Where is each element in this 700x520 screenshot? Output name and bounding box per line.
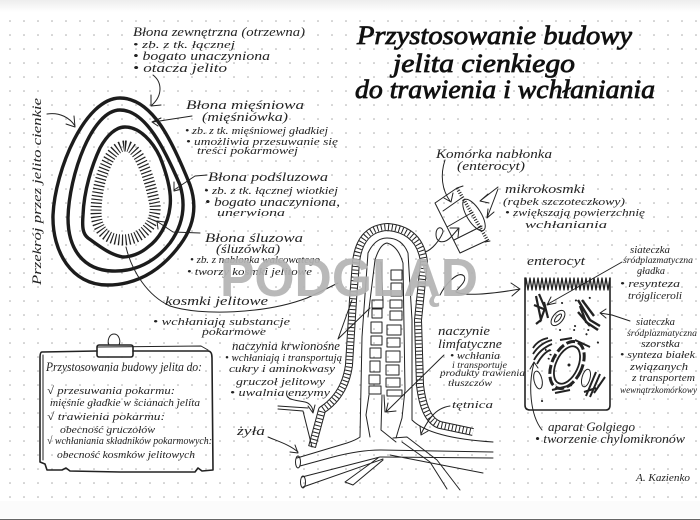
text: Golgi apparatus (535, 419, 685, 446)
arrow: outer membrane (151, 75, 161, 106)
arrow: villi leader (126, 247, 338, 312)
text: lymphatic vessels: i transportuje (452, 361, 507, 371)
arrow: vein (268, 437, 298, 453)
text: muscular layer (185, 97, 338, 157)
text: mucosa: • zb. z nabłonka walcowatego (190, 254, 320, 266)
capillary mesh (369, 270, 402, 396)
enterocyte cell (525, 278, 610, 410)
arrow: mucosa (157, 221, 200, 233)
text: rough ER: siateczka (636, 316, 675, 328)
text: muscular layer: • zb. z tk. mięśniowej gładkiej (185, 125, 328, 137)
arrow: intestinal gland (286, 391, 315, 413)
text: lymphatic vessels: produkty trawienia (439, 369, 525, 379)
text: rough ER: śródplazmatyczna (627, 329, 697, 339)
note card (40, 334, 213, 472)
text: microvilli: • zwiększają powierzchnię (505, 207, 645, 219)
title: jelita cienkiego (390, 49, 575, 78)
text: mucosa (187, 230, 320, 278)
arrow: artery (420, 406, 450, 435)
rough endoplasmic reticulum (578, 300, 600, 330)
text: submucosa: • zb. z tk. łącznej wiotkiej (204, 185, 338, 197)
epithelial fragment (435, 186, 490, 253)
arrow: cross-section label (47, 114, 75, 127)
curly arrow: villus to enterocyte (440, 275, 520, 296)
signature: A. Kazienko (635, 472, 690, 484)
title: Przystosowanie budowy (356, 21, 633, 50)
note card: √ przesuwania pokarmu: (47, 385, 175, 397)
villus diagram (278, 227, 493, 490)
capillary and lacteal walls (360, 238, 493, 442)
note card: √ wchłaniania składników pokarmowych: (47, 435, 212, 447)
arrow: rough ER (600, 309, 630, 321)
text: intestinal villi (153, 293, 290, 338)
curly arrow: villus to fragment (425, 228, 459, 252)
text: Golgi apparatus: • tworzenie chylomikronów (535, 431, 685, 446)
arrows: blood vessels (338, 300, 370, 339)
gland wall (278, 406, 312, 447)
text: blood vessels: • wchłaniają i transportują (225, 352, 342, 364)
text: rough ER: związanych (629, 361, 689, 373)
arrow: epithelial cell (442, 160, 453, 202)
enterocyte heading: enterocyt (527, 253, 585, 268)
Golgi apparatus (533, 338, 552, 364)
text: lymphatic vessels (438, 323, 525, 389)
text: mucosa: (śluzówka) (216, 241, 280, 256)
text: lymphatic vessels: tłuszczów (448, 379, 493, 389)
text: microvilli: wchłaniania (525, 219, 608, 231)
text: smooth ER (620, 244, 693, 302)
text: smooth ER: śródplazmatyczna (623, 256, 693, 266)
text: blood vessels: gruczoł jelitowy (236, 376, 325, 388)
text: rough ER: szorstka (641, 338, 681, 350)
nucleus (549, 342, 585, 388)
note card: obecność gruczołów (60, 424, 156, 436)
text: mucosa: Błona śluzowa (205, 230, 304, 245)
text: rough ER (620, 316, 698, 396)
text: lymphatic vessels: limfatyczne (438, 336, 502, 351)
note card: √ trawienia pokarmu: (47, 411, 165, 423)
text: blood vessels: • uwalnia enzymy (230, 387, 330, 399)
text: outer membrane: Błona zewnętrzna (otrzewna) (133, 24, 305, 39)
text: submucosa: • bogato unaczyniona, (205, 194, 340, 209)
text: microvilli: mikrokosmki (505, 181, 585, 196)
text: microvilli (503, 181, 645, 231)
arrow: submucosa (174, 175, 207, 191)
text: smooth ER: trójgliceroli (628, 290, 682, 302)
vertical label: cross-section: Przekrój przez jelito cienkie (29, 98, 44, 286)
text: blood vessels (225, 338, 342, 399)
text: epithelial cell: (enterocyt) (457, 158, 525, 173)
tubes at the base (297, 437, 493, 487)
text: submucosa (204, 169, 340, 219)
text: blood vessels: naczynia krwionośne (232, 338, 340, 353)
text: intestinal villi: kosmki jelitowe (165, 293, 268, 308)
text: outer membrane: • bogato unaczyniona (133, 48, 271, 63)
note card: mięśnie gładkie w ścianach jelita (50, 397, 201, 409)
arrow: lymphatic vessel (386, 355, 444, 412)
text: epithelial cell: Komórka nabłonka (435, 146, 553, 161)
text: lymphatic vessels: • wchłania (450, 350, 501, 362)
cross-section of the small intestine (53, 98, 194, 285)
text: mucosa: • tworzy kosmki jelitowe (187, 266, 312, 278)
text: smooth ER: • resynteza (620, 278, 681, 290)
text: lymphatic vessels: naczynie (438, 323, 490, 338)
arrow: Golgi apparatus (530, 362, 542, 430)
text: muscular layer: • umożliwia przesuwanie się (186, 136, 338, 148)
card clip (97, 334, 133, 357)
title: do trawienia i wchłaniania (355, 75, 655, 104)
text: intestinal villi: • wchłaniają substancje (153, 316, 290, 328)
watermark: PODGLĄD (220, 248, 478, 308)
villi ring (96, 146, 155, 240)
label: vein: żyła (236, 423, 266, 438)
text: microvilli: (rąbek szczoteczkowy) (503, 196, 625, 208)
text: muscular layer: (mięśniówka) (202, 109, 288, 124)
text: blood vessels: cukry i aminokwasy (229, 363, 335, 375)
label: artery: tętnica (452, 399, 494, 411)
text: rough ER: wewnątrzkomórkowy (620, 386, 698, 396)
text: epithelial cell (435, 146, 553, 173)
cytoplasm granules (542, 296, 600, 402)
text: outer membrane (133, 24, 305, 75)
title (355, 21, 655, 104)
text: Golgi apparatus: aparat Golgiego (548, 419, 635, 434)
text: smooth ER: gładka (637, 265, 665, 277)
note card: obecność kosmków jelitowych (57, 449, 196, 461)
text: smooth ER: siateczka (630, 244, 670, 256)
smooth endoplasmic reticulum (534, 294, 548, 324)
text: muscular layer: Błona mięśniowa (186, 97, 305, 112)
text: submucosa: Błona podśluzowa (208, 169, 329, 184)
text: rough ER: • synteza białek (620, 349, 696, 361)
arrow: muscular layer (152, 116, 192, 126)
arrow: smooth ER (547, 262, 622, 305)
text: outer membrane: • otacza jelito (133, 60, 228, 75)
text: intestinal villi: pokarmowe (201, 326, 266, 338)
text: rough ER: z transportem (631, 372, 695, 384)
text: submucosa: unerwiona (217, 207, 286, 219)
text: outer membrane: • zb. z tk. łącznej (133, 39, 235, 51)
text: muscular layer: treści pokarmowej (197, 145, 298, 157)
arrows: microvilli (480, 187, 498, 218)
note card: Przystosowania budowy jelita do: (45, 360, 202, 374)
